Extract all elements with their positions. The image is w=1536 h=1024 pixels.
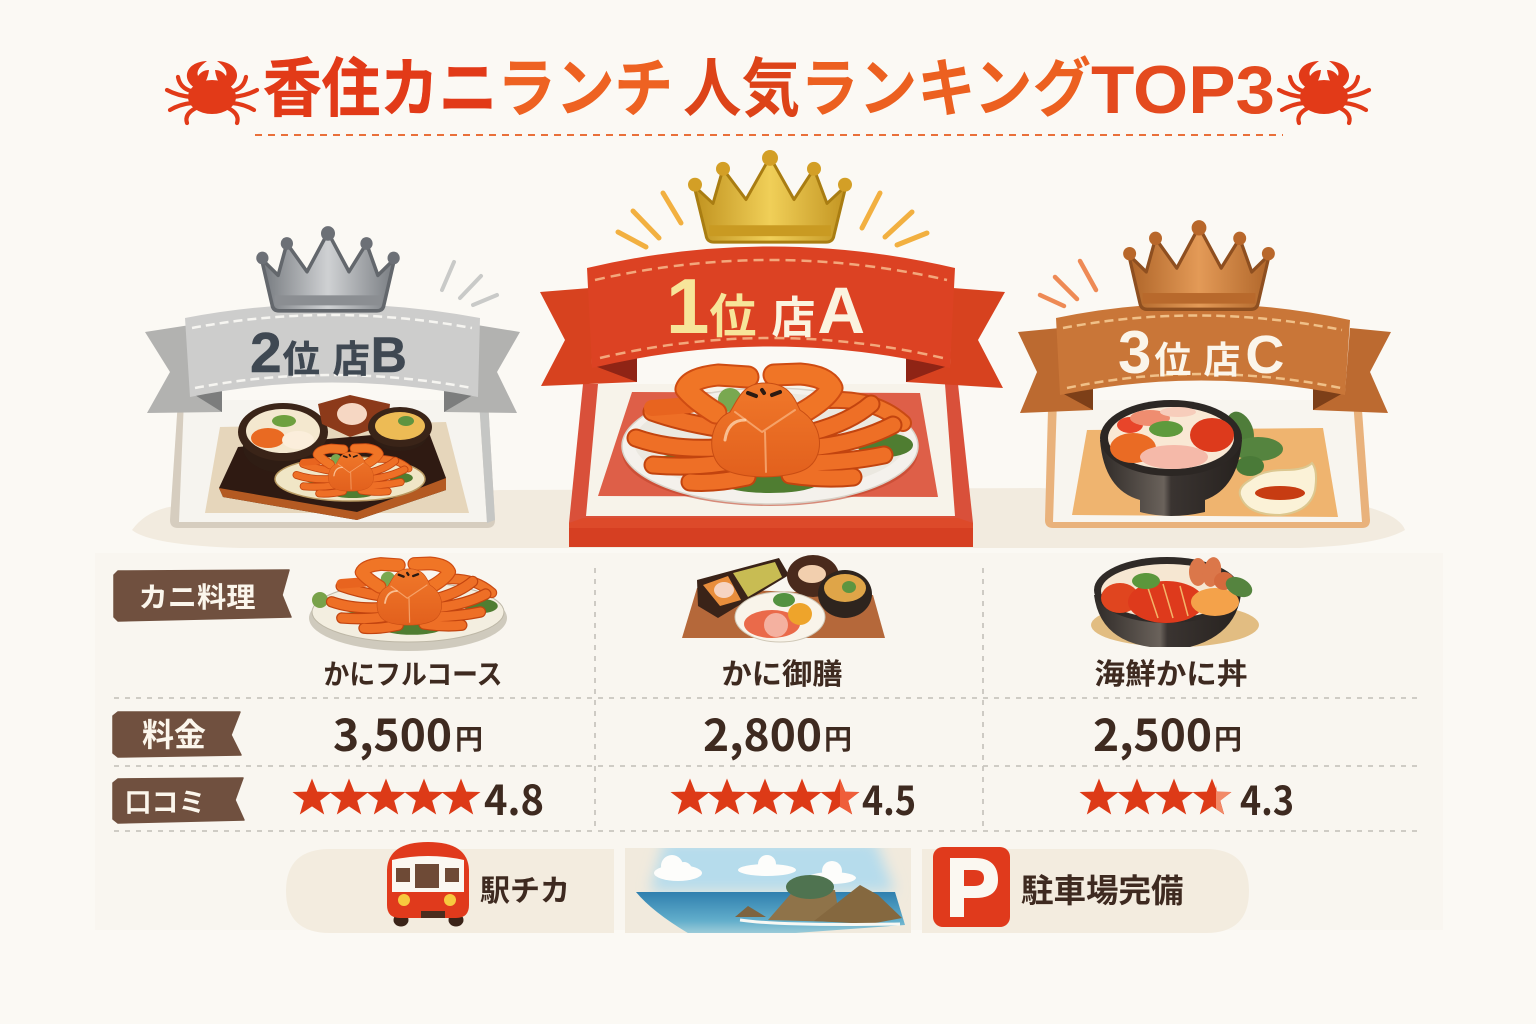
row label: 口コミ	[113, 778, 244, 823]
dish name: seafood bowl: 海鮮かに丼	[1094, 651, 1248, 693]
ribbon: 2nd place	[145, 304, 520, 413]
crown: 3rd bronze	[1123, 220, 1275, 309]
placemat	[205, 422, 469, 513]
price: shop B: 円	[824, 718, 852, 758]
price: shop A: 円	[455, 718, 483, 758]
placemat	[598, 392, 938, 497]
title text: part 3: TOP3	[1091, 52, 1275, 128]
title text: part 2: 人気ランキング	[683, 38, 1091, 130]
food: crab set meal	[682, 555, 885, 642]
crown: 1st gold	[688, 150, 852, 242]
row label: 口コミ: 口コミ	[124, 781, 206, 820]
food: seafood bowl	[1100, 400, 1316, 516]
rating stars: shop A	[292, 778, 480, 814]
ribbon label: 3位 店C	[1118, 319, 1284, 386]
clouds	[654, 855, 856, 884]
sparkles: 1st	[618, 193, 927, 247]
price: shop B: 2,800	[703, 700, 822, 764]
icon: red train	[387, 842, 469, 926]
ribbon label: 1位 店A	[666, 262, 865, 350]
crown: 2nd silver	[256, 226, 400, 311]
food: seafood crab bowl	[1091, 556, 1259, 647]
price: shop C: 円	[1214, 718, 1242, 758]
panel: 2nd place podium	[170, 395, 495, 528]
food: crab tray set	[219, 395, 446, 520]
feature text: 駅チカ	[480, 866, 570, 910]
rating stars: shop B	[670, 778, 860, 814]
rating value: shop A: 4.8	[484, 767, 544, 827]
sparkles: 2nd	[442, 262, 497, 305]
price: shop A: 3,500	[333, 700, 452, 764]
ribbon: 3rd place	[1018, 303, 1391, 413]
row label: カニ料理	[114, 570, 291, 621]
price: shop C: 2,500	[1093, 700, 1212, 764]
food: big crab plate	[622, 374, 918, 506]
feature text: 駐車場完備	[1021, 865, 1184, 912]
row label: 料金: 料金	[142, 710, 206, 756]
icon: left crab	[167, 61, 257, 123]
sparkles: 3rd	[1040, 261, 1096, 306]
feature: parking	[922, 847, 1249, 933]
panel: 1st place podium	[569, 374, 973, 547]
row label: 料金	[113, 710, 241, 757]
rating value: shop B: 4.5	[862, 769, 916, 827]
panel: comparison table	[95, 553, 1443, 930]
rocks	[735, 875, 902, 924]
title	[167, 38, 1369, 130]
panel: 3rd place podium	[1045, 400, 1370, 528]
dish name: full course: かにフルコース	[324, 653, 502, 693]
rating stars: shop C	[1080, 778, 1232, 814]
row label: カニ料理: カニ料理	[138, 576, 256, 616]
scene: seaside illustration	[625, 848, 911, 933]
podium ground shadow	[132, 488, 1405, 548]
feature: near station	[286, 842, 614, 933]
icon: right crab	[1279, 61, 1369, 123]
ribbon: 1st place	[540, 246, 1005, 388]
title text: part 1: 香住カニランチ	[263, 38, 673, 130]
dish name: set meal: かに御膳	[722, 651, 842, 693]
rating value: shop C: 4.3	[1240, 769, 1294, 827]
ribbon label: 2位 店B	[250, 321, 407, 385]
food: crab full-course plate	[309, 563, 507, 651]
placemat	[1072, 428, 1338, 517]
icon: parking sign	[933, 847, 1010, 927]
